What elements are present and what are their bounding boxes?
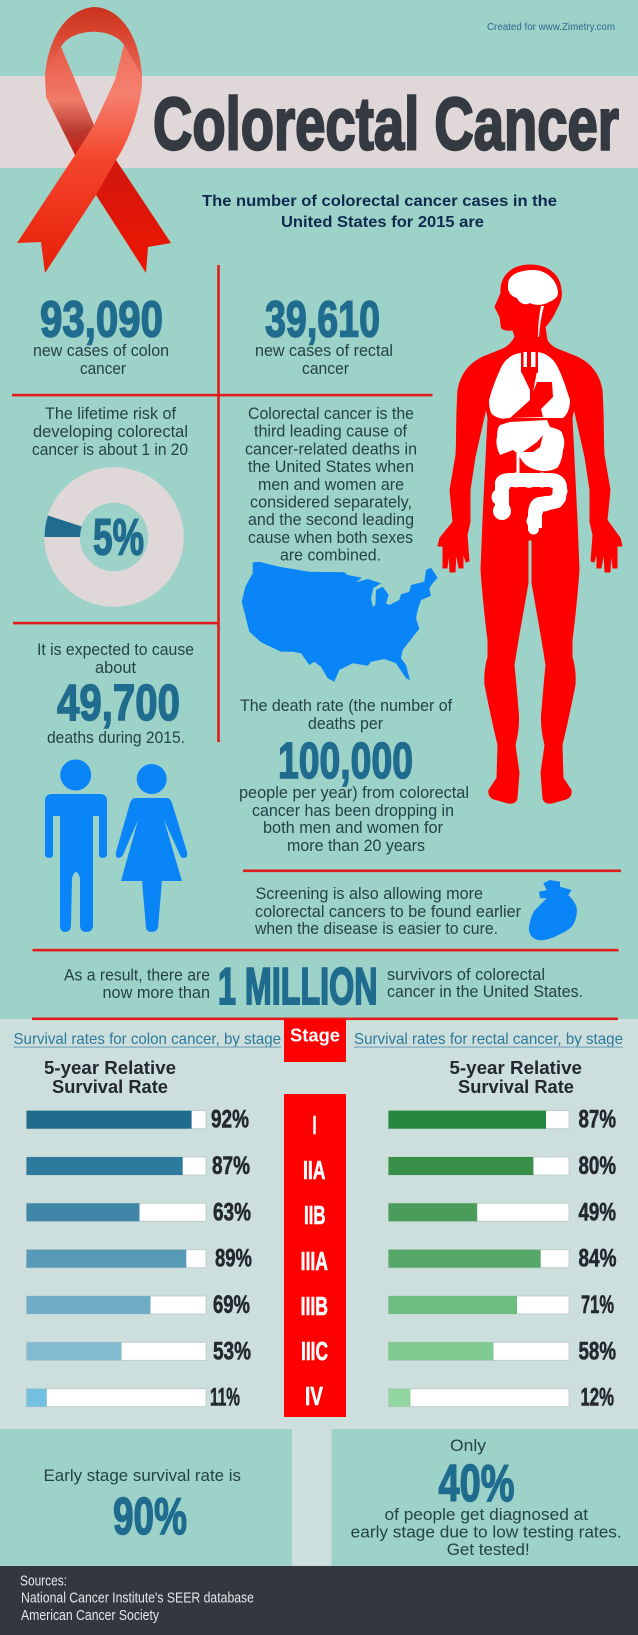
- bar chart: colon cancer survival: 92%: [211, 1106, 249, 1134]
- stat: 1 million survivors: cancer in the United States.: [387, 982, 583, 1001]
- stat: new rectal cases: 39,610: [265, 290, 380, 348]
- stat: death rate: The death rate (the number of: [240, 696, 452, 715]
- map: United States: [242, 562, 438, 682]
- bar chart: rectal cancer survival: 84%: [578, 1245, 616, 1273]
- label: colon chart title: 5-year Relative: [44, 1057, 176, 1078]
- stat: new rectal cases: [255, 290, 393, 378]
- stat: death rate: 100,000: [278, 732, 413, 789]
- stage column: IV: [305, 1381, 323, 1411]
- bar chart: rectal cancer survival: [388, 1106, 616, 1412]
- stat: expected deaths: deaths during 2015.: [47, 728, 185, 747]
- stat: new rectal cases: cancer: [302, 359, 349, 378]
- stat: death rate: [239, 696, 469, 855]
- text: screening: colorectal cancers to be found earlier: [255, 902, 521, 921]
- heading: rectal survival: Survival rates for rectal cancer, by stage: [354, 1031, 623, 1048]
- stage header: Stage: [290, 1026, 340, 1046]
- text: lifetime risk: developing colorectal: [33, 422, 188, 441]
- bar chart: colon cancer survival: 11%: [210, 1384, 240, 1412]
- bar chart: colon cancer survival: 87%: [212, 1152, 250, 1180]
- text: third leading cause: third leading cause of: [254, 422, 407, 441]
- footer: sources: National Cancer Institute's SEER database: [21, 1591, 254, 1607]
- stat: 1 million survivors: [64, 958, 583, 1016]
- stage column: IIIC: [301, 1336, 328, 1366]
- footer: sources: American Cancer Society: [21, 1608, 160, 1624]
- bar chart: colon cancer survival: 63%: [213, 1198, 251, 1226]
- text: lifetime risk: cancer is about 1 in 20: [32, 440, 188, 459]
- bar chart: rectal cancer survival: 12%: [580, 1384, 614, 1412]
- organ: trachea and heart: [510, 352, 553, 418]
- panel: early stage survival: Early stage survival rate is: [44, 1466, 241, 1485]
- text: third leading cause: cause when both sexes: [248, 528, 413, 547]
- stat: death rate: more than 20 years: [287, 836, 425, 855]
- text: screening: Screening is also allowing more: [256, 884, 483, 903]
- stat: 1 million survivors: As a result, there are: [64, 966, 210, 985]
- donut chart: 5%: 5%: [93, 508, 144, 566]
- stat: expected deaths: It is expected to cause: [37, 640, 194, 659]
- panel: diagnosis rate: 40%: [438, 1455, 514, 1513]
- panel: early stage survival: 90%: [113, 1488, 187, 1546]
- text: third leading cause: Colorectal cancer is the: [248, 404, 414, 423]
- stat: expected deaths: about: [95, 658, 136, 677]
- stage column: IIIB: [301, 1291, 328, 1321]
- text: third leading cause: cancer-related deaths in: [245, 440, 417, 458]
- panel: survival rates: [0, 1018, 638, 1566]
- panel: diagnosis rate: [332, 1429, 638, 1566]
- text: third leading cause: considered separately,: [250, 492, 412, 512]
- footer: sources: Sources:: [20, 1574, 67, 1590]
- bar chart: colon cancer survival: 69%: [213, 1291, 250, 1319]
- illustration: human body with organs: [438, 265, 622, 803]
- text: third leading cause: and the second leading: [248, 510, 414, 529]
- panel: diagnosis rate: Only: [450, 1436, 487, 1455]
- donut chart: 5%: [44, 485, 166, 589]
- bar chart: colon cancer survival: [26, 1106, 252, 1412]
- label: rectal chart title: [450, 1057, 582, 1097]
- stat: 1 million survivors: now more than: [102, 983, 210, 1002]
- stat: 1 million survivors: survivors of colorectal: [387, 965, 545, 984]
- stage header: [284, 1019, 346, 1062]
- organ: brain: [508, 270, 558, 337]
- label: colon chart title: [44, 1057, 176, 1097]
- credit line: Created for www.Zimetry.com: [487, 22, 615, 33]
- label: rectal chart title: Survival Rate: [458, 1076, 574, 1097]
- stat: new colon cases: cancer: [80, 359, 126, 378]
- bar chart: colon cancer survival: 53%: [213, 1337, 251, 1365]
- stat: expected deaths: [37, 640, 194, 747]
- intro heading: United States for 2015 are: [281, 214, 484, 231]
- stat: death rate: both men and women for: [263, 818, 443, 837]
- bar chart: rectal cancer survival: 58%: [578, 1337, 616, 1365]
- bar chart: rectal cancer survival: 87%: [578, 1106, 616, 1134]
- stat: new colon cases: 93,090: [40, 290, 163, 348]
- icon: woman: [116, 764, 187, 932]
- organ: colon: [492, 452, 568, 534]
- text: screening: when the disease is easier to cure.: [254, 919, 498, 938]
- stat: new rectal cases: new cases of rectal: [255, 341, 393, 360]
- icon: man: [45, 760, 107, 932]
- text: lifetime risk: The lifetime risk of: [45, 404, 176, 423]
- organ: trachea bars: [524, 352, 536, 367]
- stat: death rate: people per year) from colorectal: [239, 783, 469, 802]
- text: screening: [254, 884, 521, 938]
- stage column: IIB: [304, 1200, 326, 1230]
- organ: liver and stomach: [496, 420, 564, 471]
- heading: colon survival: Survival rates for colon cancer, by stage: [14, 1031, 281, 1048]
- panel: diagnosis rate: of people get diagnosed at: [384, 1505, 588, 1524]
- bar chart: rectal cancer survival: 49%: [578, 1198, 616, 1226]
- intro heading: The number of colorectal cancer cases in the: [202, 193, 557, 210]
- text: third leading cause: the United States when: [248, 457, 414, 476]
- text: third leading cause: are combined.: [280, 546, 381, 564]
- label: colon chart title: Survival Rate: [52, 1076, 168, 1097]
- icon: red awareness ribbon: [17, 7, 171, 273]
- title band: [0, 76, 638, 168]
- organ: lungs: [489, 352, 570, 419]
- stat: death rate: cancer has been dropping in: [252, 801, 454, 820]
- stage column: I: [312, 1110, 316, 1140]
- stat: death rate: deaths per: [308, 714, 383, 733]
- bar chart: rectal cancer survival: 71%: [581, 1291, 614, 1319]
- stat: 1 million survivors: 1 MILLION: [218, 958, 378, 1016]
- stage column: IIA: [303, 1155, 326, 1185]
- text: third leading cause: [245, 404, 417, 564]
- text: third leading cause: men and women are: [258, 475, 404, 494]
- organ: stomach fold: [523, 435, 543, 452]
- stat: new colon cases: [33, 290, 169, 378]
- panel: diagnosis rate: Get tested!: [447, 1540, 530, 1559]
- panel: diagnosis rate: early stage due to low testing rates.: [351, 1523, 622, 1542]
- icon: heart: [529, 880, 577, 940]
- stage column: [284, 1094, 346, 1417]
- stage column: IIIA: [301, 1246, 328, 1276]
- intro heading: [202, 193, 557, 231]
- stat: new colon cases: new cases of colon: [33, 341, 169, 360]
- bar chart: colon cancer survival: 89%: [215, 1245, 252, 1273]
- stat: expected deaths: 49,700: [57, 674, 180, 731]
- text: lifetime risk: [32, 404, 188, 459]
- label: rectal chart title: 5-year Relative: [450, 1057, 582, 1078]
- panel: early stage survival: [0, 1429, 292, 1566]
- footer: sources: [0, 1566, 638, 1635]
- bar chart: rectal cancer survival: 80%: [578, 1152, 616, 1180]
